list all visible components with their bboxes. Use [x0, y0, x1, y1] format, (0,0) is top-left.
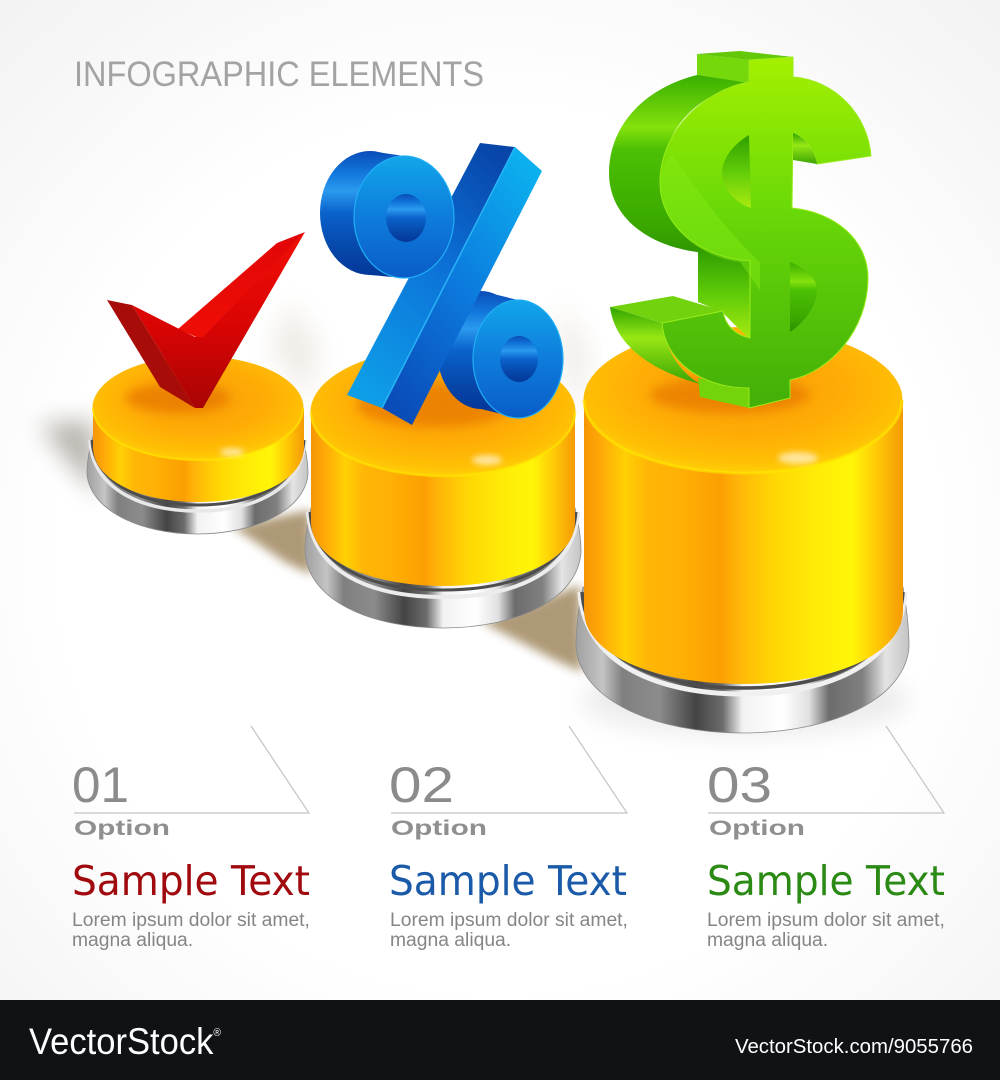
number: 01 — [72, 757, 129, 813]
body text: magna aliqua. — [390, 930, 511, 951]
left side facet — [107, 300, 195, 408]
yellow top 2 — [310, 348, 576, 476]
metal base 1 — [87, 436, 308, 534]
icon: red check mark — [107, 232, 305, 408]
body text: Lorem ipsum dolor sit amet, — [72, 910, 310, 931]
number: 02 — [389, 757, 454, 813]
lower hole — [790, 262, 817, 332]
body text: Lorem ipsum dolor sit amet, — [390, 910, 628, 931]
lower arm top — [610, 296, 723, 323]
front facet — [132, 232, 305, 408]
cylinder 3 with metal base — [576, 327, 909, 733]
option label: Option — [391, 817, 487, 840]
option label: Option — [709, 817, 805, 840]
column 3 — [707, 726, 945, 951]
watermark logo: VectorStock — [29, 1021, 226, 1062]
slash — [347, 143, 542, 425]
upper ring — [320, 151, 454, 278]
angled rule — [391, 726, 627, 813]
front highlight — [660, 153, 760, 290]
watermark url: VectorStock.com/9055766 — [735, 1036, 973, 1058]
front face — [660, 57, 871, 408]
body text: magna aliqua. — [72, 930, 193, 951]
option label: Option — [74, 817, 170, 840]
yellow body 3 — [584, 400, 903, 684]
yellow body 2 — [311, 415, 575, 586]
lower arm side — [610, 307, 700, 384]
cylinder 1 with metal base — [87, 356, 308, 534]
metal base 2 — [305, 508, 581, 628]
yellow top 1 — [92, 356, 304, 460]
upper curve side — [609, 75, 749, 262]
lower ring — [437, 291, 563, 418]
yellow body 1 — [93, 408, 304, 502]
yellow top 3 — [584, 327, 902, 473]
angled rule — [74, 726, 309, 813]
heading: Sample Text — [389, 857, 627, 905]
icon: blue percent sign — [320, 143, 563, 425]
footer bar — [0, 1000, 1000, 1080]
middle bar side — [698, 250, 750, 340]
icon: green dollar sign — [609, 51, 871, 408]
angled rule — [708, 726, 944, 813]
upper hole — [722, 135, 751, 208]
cast shadows — [40, 300, 910, 736]
column 1 — [72, 726, 310, 951]
lower bar side — [698, 378, 749, 408]
watermark logo: ® — [213, 1027, 221, 1039]
column 2 — [389, 726, 628, 951]
notch side — [793, 133, 817, 164]
heading: Sample Text — [707, 857, 945, 905]
metal base 3 — [576, 587, 909, 733]
cylinder 2 with metal base — [305, 348, 581, 628]
back facet — [178, 232, 305, 340]
body text: Lorem ipsum dolor sit amet, — [707, 910, 945, 931]
body text: magna aliqua. — [707, 930, 828, 951]
heading: Sample Text — [72, 857, 310, 905]
title: INFOGRAPHIC ELEMENTS — [74, 55, 484, 94]
top of bar — [697, 51, 793, 60]
number: 03 — [707, 757, 772, 813]
